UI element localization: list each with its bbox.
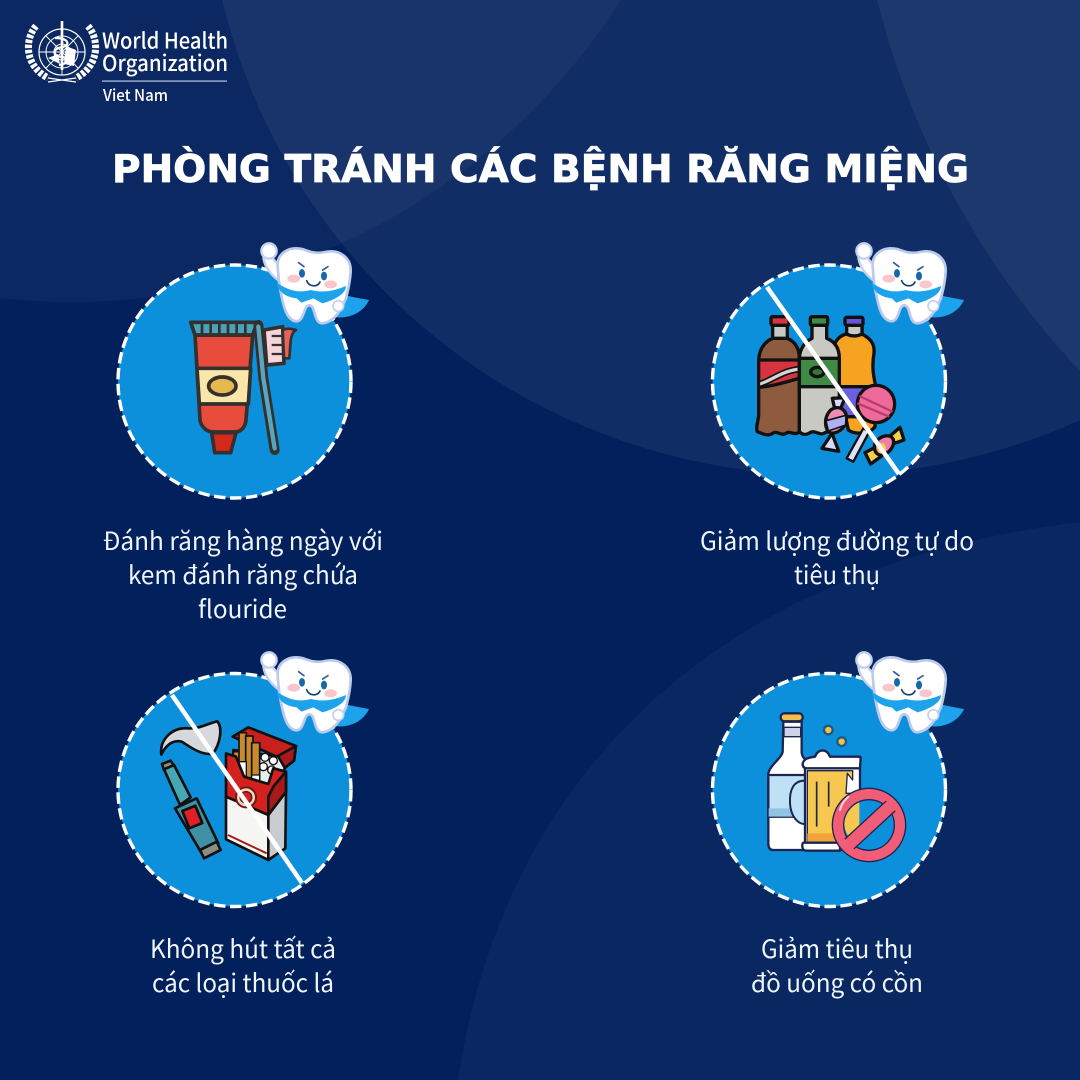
strike line	[767, 287, 899, 474]
text: brush teeth: flouride	[198, 590, 287, 626]
icon: prohibition sign	[831, 787, 907, 863]
logo: World Health Organization Viet Nam: Viet Nam	[102, 82, 168, 106]
mascot: tooth	[261, 652, 369, 732]
text: reduce alcohol: đồ uống có cồn	[751, 964, 923, 1000]
background	[0, 0, 1080, 470]
text: no tobacco	[152, 936, 334, 998]
text: reduce alcohol	[752, 936, 921, 998]
strike line	[172, 695, 302, 883]
mascot: tooth	[261, 243, 369, 323]
text: brush teeth	[104, 528, 382, 618]
mascot: tooth	[856, 652, 964, 732]
title: PHÒNG TRÁNH CÁC BỆNH RĂNG MIỆNG	[112, 147, 969, 191]
icon: cigarettes and vape	[161, 721, 296, 860]
logo: World Health Organization Viet Nam	[28, 21, 228, 106]
text: no tobacco: các loại thuốc lá	[152, 964, 334, 1000]
text: reduce alcohol: Giảm tiêu thụ	[761, 930, 913, 966]
text: reduce sugar: tiêu thụ	[794, 556, 880, 592]
icon: WHO emblem	[28, 21, 96, 82]
text: no tobacco: Không hút tất cả	[150, 930, 336, 966]
icon: toothpaste and toothbrush	[191, 322, 296, 453]
text: reduce sugar: Giảm lượng đường tự do	[700, 522, 974, 558]
mascot: tooth	[856, 243, 964, 323]
panel: reduce alcohol	[712, 652, 964, 906]
icon: beer and no sign	[768, 713, 907, 863]
panel: brush teeth	[118, 243, 369, 498]
circle badge	[118, 265, 351, 498]
text: brush teeth: kem đánh răng chứa	[128, 556, 358, 592]
text: brush teeth: Đánh răng hàng ngày với	[103, 522, 383, 558]
logo wordmark: World Health	[102, 24, 228, 56]
logo: World Health Organization Viet Nam: Organization	[102, 46, 228, 78]
text: reduce sugar	[701, 528, 973, 590]
circle badge	[118, 674, 351, 906]
circle badge	[712, 265, 946, 498]
icon: soft drinks and candy	[757, 317, 904, 464]
panel: reduce sugar	[712, 243, 964, 498]
circle badge	[712, 674, 946, 906]
panel: no tobacco	[118, 652, 369, 906]
